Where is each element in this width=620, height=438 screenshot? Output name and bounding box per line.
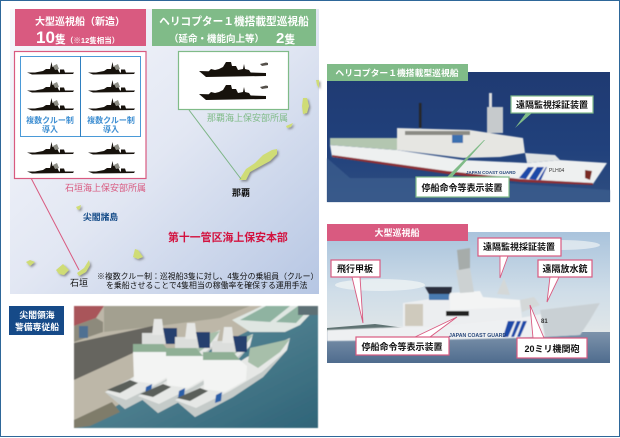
- callout: remote monitoring device: [511, 96, 593, 113]
- ship icons: [199, 62, 268, 100]
- callout: stop order display: [356, 337, 449, 355]
- label: multi-crew left: 複数クルー制: [26, 115, 74, 125]
- note: multiple crew system: [97, 271, 318, 290]
- callout pointer: stop order display: [447, 140, 485, 177]
- photo: large patrol vessel: 81: [541, 319, 548, 325]
- callout: 20mm machine gun: 20ミリ機関砲: [524, 343, 580, 354]
- label: large vessel: [327, 224, 468, 241]
- label: multi-crew left: 導入: [42, 124, 58, 134]
- line: Naha base: [189, 110, 241, 179]
- ship: [327, 303, 600, 341]
- photo: helicopter-carrying patrol vessel: JAPAN COAST GUARD: [466, 170, 516, 175]
- multi-crew box: [20, 56, 140, 136]
- label: multi-crew right: 導入: [103, 124, 119, 134]
- ship 3: [175, 327, 290, 417]
- callout: flight deck: [331, 260, 380, 277]
- ship 1: [105, 319, 220, 409]
- callout: remote water cannon: 遠隔放水銃: [542, 263, 588, 274]
- callout: remote monitoring device: 遠隔監視採証装置: [483, 241, 555, 252]
- label: large vessel: 大型巡視船: [374, 227, 420, 238]
- islands: outlying islands: [26, 80, 319, 266]
- label: Senkaku vessels: 尖閣領海: [19, 309, 55, 320]
- label: Ishigaki: 石垣: [70, 278, 88, 288]
- callout: remote monitoring device: [478, 238, 561, 256]
- label: multi-crew right: 複数クルー制: [87, 115, 135, 125]
- line: Ishigaki base: [31, 178, 79, 270]
- ship 2: [138, 323, 253, 413]
- photo: large patrol vessel: JAPAN COAST GUARD: [449, 333, 507, 339]
- callout pointers: [352, 256, 559, 338]
- label: Senkaku vessels: [9, 306, 64, 335]
- callout: stop order display: 停船命令等表示装置: [421, 182, 503, 193]
- callout: stop order display: 停船命令等表示装置: [361, 341, 443, 352]
- panel: Naha fleet: [178, 52, 288, 110]
- note: multiple crew system: ※複数クルー制：巡視船3隻に対し、4隻分の乗組員（クルー）: [97, 271, 318, 281]
- ship hull: [330, 145, 607, 184]
- panel: Ishigaki fleet: [14, 52, 146, 178]
- label: helicopter vessel: [327, 64, 468, 81]
- callout: stop order display: [416, 177, 509, 197]
- label: Senkaku Islands: 尖閣諸島: [83, 211, 118, 222]
- heading: helicopter patrol vessels: 2隻: [276, 30, 295, 47]
- islands: Okinawa main island: [239, 149, 277, 180]
- label: Naha: 那覇: [232, 187, 250, 198]
- heading: helicopter patrol vessels: ヘリコプター１機搭載型巡視船: [159, 15, 309, 28]
- label: Naha base: 那覇海上保安部所属: [207, 112, 288, 123]
- callout: remote monitoring device: 遠隔監視採証装置: [516, 99, 588, 110]
- label: Ishigaki base: 石垣海上保安部所属: [65, 182, 146, 193]
- heading: helicopter patrol vessels: （延命・機能向上等）: [169, 33, 264, 45]
- hull stripes: [519, 167, 547, 180]
- heading: large patrol vessels: 大型巡視船（新造）: [35, 15, 125, 28]
- photo: helicopter-carrying patrol vessel: [327, 64, 610, 202]
- heading: helicopter patrol vessels: [152, 9, 316, 47]
- callout pointer: remote monitoring: [515, 113, 532, 128]
- ship icons: [27, 62, 135, 174]
- photo: helicopter-carrying patrol vessel: PLH04: [549, 168, 565, 174]
- callout: remote water cannon: [538, 260, 592, 277]
- background ships: [232, 306, 318, 332]
- label: Senkaku vessels: 警備専従船: [15, 321, 59, 332]
- callout: 20mm machine gun: [517, 338, 587, 358]
- callout: flight deck: 飛行甲板: [337, 263, 373, 274]
- label: helicopter vessel: ヘリコプター１機搭載型巡視船: [335, 67, 459, 78]
- heading: 11th Regional HQ: 第十一管区海上保安本部: [168, 230, 288, 244]
- photo: three patrol vessels at pier: [74, 306, 318, 428]
- heading: large patrol vessels: [15, 9, 146, 47]
- island: Ishigaki: [56, 260, 90, 276]
- photo: large patrol vessel: [327, 224, 610, 363]
- note: multiple crew system: を乗船させることで4隻相当の稼働率を確保する運用手法: [106, 280, 308, 290]
- panel: sea map: [10, 9, 319, 294]
- heading: large patrol vessels: 10隻（※12隻相当）: [36, 28, 119, 47]
